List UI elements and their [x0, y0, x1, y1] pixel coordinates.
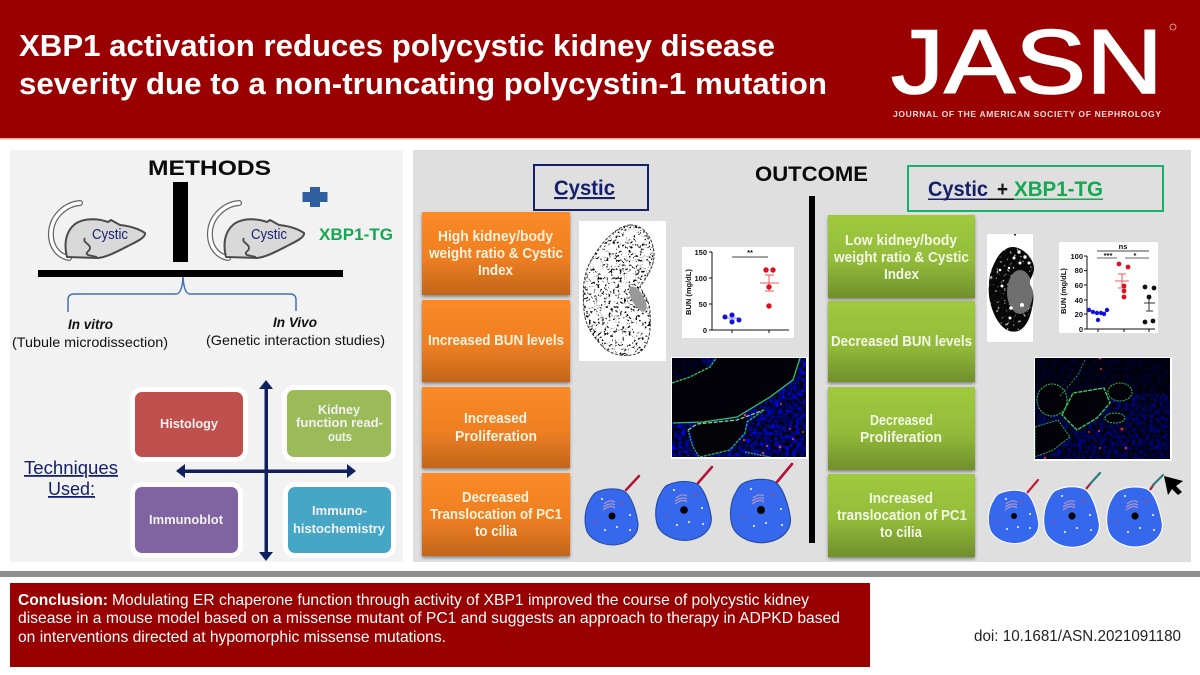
- center divider: [809, 196, 815, 543]
- chart: BUN cystic plus XBP1-TG scatter: 20: [1075, 310, 1083, 319]
- JASN logo: JOURNAL OF THE AMERICAN SOCIETY OF NEPHROLOGY: [893, 109, 1161, 119]
- cell: cystic cell 2: [656, 467, 712, 540]
- chart: BUN cystic plus XBP1-TG scatter: *: [1134, 251, 1137, 260]
- brace linking in vitro and in vivo: [68, 277, 296, 312]
- technique: kidney function read-outs: outs: [328, 430, 352, 444]
- chart: BUN cystic plus XBP1-TG scatter: 0: [1079, 325, 1083, 334]
- technique: kidney function read-outs: [282, 385, 396, 462]
- cystic plus XBP1-TG group heading: XBP1-TG: [1014, 178, 1103, 201]
- cell: cystic cell 1: [585, 476, 639, 545]
- micrograph: cystic proliferation: [671, 357, 808, 459]
- in vitro label: [12, 316, 168, 350]
- chart: BUN cystic plus XBP1-TG scatter: 60: [1075, 281, 1083, 290]
- orange box: translocation: Decreased: [462, 490, 529, 506]
- title: XBP1 activation reduces polycystic kidney disease: [19, 28, 775, 63]
- panel: outcome: [413, 150, 1191, 562]
- orange box: translocation: [422, 473, 570, 556]
- in vitro label: (Tubule microdissection): [12, 334, 168, 350]
- orange box: translocation: Translocation of PC1: [430, 507, 562, 523]
- icon: cystic mouse with transgene: Cystic: [251, 226, 287, 243]
- micrograph: cystic plus XBP1-TG proliferation: [1034, 356, 1172, 461]
- techniques used label: [24, 458, 118, 499]
- cell: XBP1-TG cell 2: [1044, 473, 1100, 547]
- header banner: [0, 0, 1200, 140]
- icon: black pointer arrow: [1164, 476, 1183, 495]
- outcome heading: OUTCOME: [755, 163, 868, 186]
- conclusion box: Conclusion:: [18, 592, 108, 609]
- cystic group heading: Cystic: [554, 177, 615, 200]
- technique: kidney function read-outs: function read-: [296, 416, 383, 430]
- icon: cystic mouse with transgene: [210, 203, 304, 258]
- doi citation: doi: 10.1681/ASN.2021091180: [974, 628, 1181, 645]
- technique: immunoblot: Immunoblot: [149, 513, 224, 527]
- icon: cystic mouse: Cystic: [92, 226, 128, 243]
- chart: BUN cystic scatter: BUN (mg/dL): [684, 269, 693, 315]
- orange box: BUN: Increased BUN levels: [428, 333, 564, 349]
- title: [19, 28, 827, 101]
- green box: kidney weight: weight ratio & Cystic: [833, 250, 969, 266]
- technique: histology: Histology: [160, 417, 218, 431]
- chart: BUN cystic scatter: 0: [703, 326, 707, 335]
- cystic plus XBP1-TG group heading: +: [997, 178, 1008, 201]
- cystic plus XBP1-TG group heading: [908, 166, 1163, 211]
- in vivo label: In Vivo: [273, 314, 317, 330]
- green box: translocation: [828, 474, 975, 557]
- orange box: kidney weight: High kidney/body: [438, 229, 553, 245]
- orange box: kidney weight: Index: [478, 263, 513, 279]
- green box: kidney weight: Low kidney/body: [845, 233, 957, 249]
- green box: BUN: Decreased BUN levels: [831, 334, 972, 350]
- technique: immunoblot: [130, 482, 243, 558]
- chart: BUN cystic plus XBP1-TG scatter: ***: [1104, 251, 1112, 260]
- cystic plus XBP1-TG group heading: Cystic: [928, 178, 988, 201]
- orange box: BUN: [422, 300, 570, 382]
- chart: BUN cystic scatter: **: [747, 248, 753, 257]
- conclusion box: on interventions directed at hypomorphic missense mutations.: [18, 629, 446, 646]
- technique: kidney function read-outs: Kidney: [318, 403, 360, 417]
- conclusion box: disease in a mouse model based on a missense mutant of PC1 and suggests an approach to therapy in ADPKD based: [18, 610, 840, 627]
- chart: BUN cystic plus XBP1-TG scatter: [1059, 242, 1158, 334]
- green box: proliferation: [828, 387, 975, 470]
- icon: cystic mouse: [51, 203, 145, 258]
- cell: XBP1-TG cell 1: [988, 480, 1039, 544]
- technique: immunohistochemistry: [283, 482, 396, 558]
- chart: BUN cystic plus XBP1-TG scatter: 100: [1070, 252, 1083, 261]
- green box: BUN: [828, 301, 975, 382]
- cystic group heading: [534, 165, 648, 210]
- techniques used label: Techniques: [24, 458, 118, 478]
- technique: immunohistochemistry: histochemistry: [293, 522, 385, 536]
- chart: BUN cystic plus XBP1-TG scatter: 40: [1075, 296, 1083, 305]
- XBP1-TG label: XBP1-TG: [319, 225, 393, 244]
- chart: BUN cystic plus XBP1-TG scatter: ns: [1119, 242, 1127, 251]
- panel: methods: [10, 150, 403, 562]
- conclusion box: Modulating ER chaperone function through activity of XBP1 improved the course of polycystic kidney: [112, 592, 809, 609]
- green box: kidney weight: [828, 215, 975, 298]
- chart: BUN cystic scatter: 150: [694, 248, 707, 257]
- icon: plus sign: [302, 187, 328, 207]
- chart: BUN cystic scatter: [682, 247, 794, 338]
- JASN logo: JASN: [891, 12, 1163, 113]
- orange box: proliferation: Proliferation: [455, 429, 537, 445]
- title: severity due to a non-truncating polycystin-1 mutation: [19, 66, 827, 101]
- cell: cystic cell 3: [731, 464, 792, 543]
- chart: BUN cystic scatter: 50: [699, 300, 707, 309]
- kidney section: cystic: [579, 221, 666, 361]
- green box: translocation: Increased: [869, 491, 933, 507]
- techniques used label: Used:: [48, 479, 95, 499]
- green box: proliferation: Decreased: [870, 413, 933, 429]
- orange box: kidney weight: [422, 212, 570, 295]
- orange box: proliferation: Increased: [464, 411, 527, 427]
- in vivo label: (Genetic interaction studies): [206, 332, 385, 348]
- footer divider band: [0, 571, 1200, 577]
- green box: translocation: translocation of PC1: [837, 508, 967, 524]
- cross arrows: [176, 380, 356, 561]
- technique: histology: [130, 387, 248, 462]
- in vitro label: In vitro: [68, 316, 113, 332]
- chart: BUN cystic scatter: 100: [694, 274, 707, 283]
- green box: kidney weight: Index: [884, 267, 919, 283]
- in vivo label: [206, 314, 385, 348]
- orange box: translocation: to cilia: [475, 524, 518, 540]
- orange box: proliferation: [422, 387, 570, 468]
- cell: XBP1-TG cell 3: [1107, 475, 1163, 547]
- green box: proliferation: Proliferation: [860, 430, 942, 446]
- kidney section: cystic plus XBP1-TG: [987, 234, 1035, 342]
- technique: immunohistochemistry: Immuno-: [312, 504, 367, 518]
- balance bar: [38, 270, 343, 277]
- chart: BUN cystic plus XBP1-TG scatter: 80: [1075, 266, 1083, 275]
- green box: translocation: to cilia: [880, 525, 923, 541]
- methods heading: METHODS: [148, 156, 271, 180]
- divider bar between mice: [173, 182, 188, 262]
- orange box: kidney weight: weight ratio & Cystic: [428, 246, 563, 262]
- conclusion box: [10, 583, 870, 667]
- chart: BUN cystic plus XBP1-TG scatter: BUN (mg/dL): [1059, 268, 1068, 314]
